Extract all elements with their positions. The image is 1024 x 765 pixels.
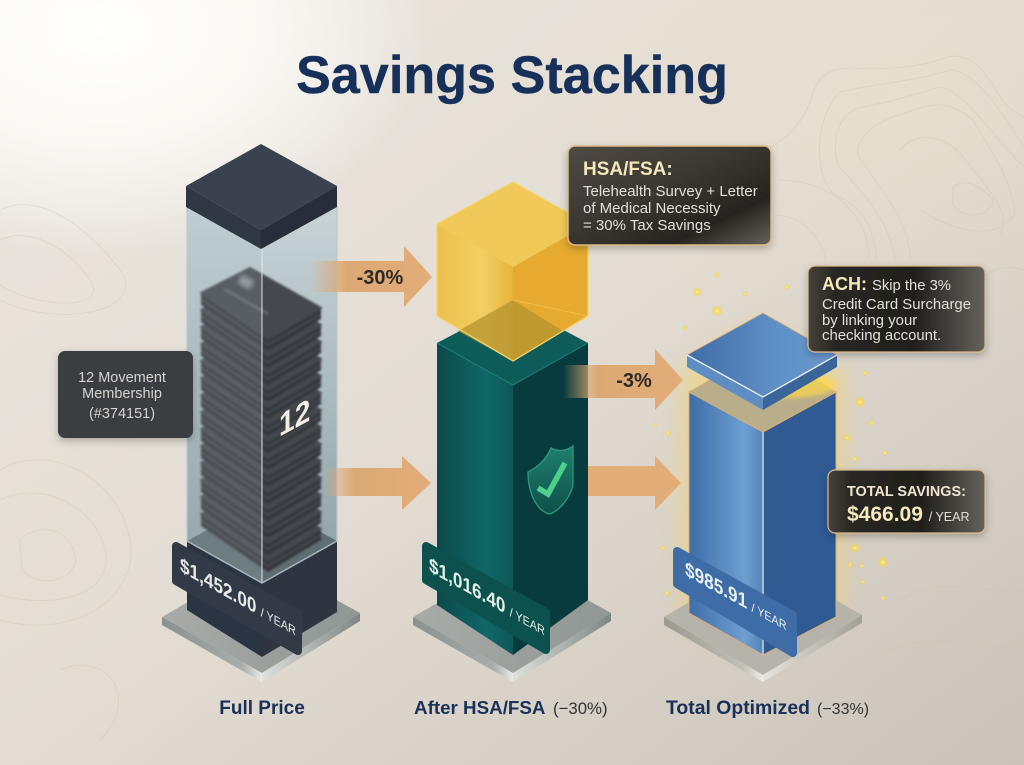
arrow: -3%: -3%: [616, 370, 652, 392]
arrow: -30%: -30%: [357, 267, 404, 289]
blue pillar: [689, 350, 836, 655]
stack of 12 cards: [201, 268, 321, 572]
glass case: [187, 205, 337, 583]
arrow: HSA to total: [588, 456, 681, 510]
callout: HSA/FSA: Telehealth Survey + Letter: [583, 183, 758, 200]
callout: membership: 12 Movement: [78, 370, 166, 386]
callout: membership: Membership: [82, 386, 162, 402]
price tag: $1,016.40 / YEAR: [429, 554, 545, 641]
callout: ACH: by linking your: [822, 313, 917, 329]
callout: HSA/FSA: HSA/FSA:: [583, 159, 673, 180]
tower base block: [187, 541, 337, 657]
lid: [687, 313, 837, 410]
callout: ACH: Credit Card Surcharge: [822, 297, 971, 313]
callout: ACH: [808, 266, 985, 352]
column: after HSA/FSA tower: [413, 182, 611, 682]
gold cube: [437, 182, 588, 361]
tower cap: [186, 144, 337, 249]
teal pillar: [437, 303, 588, 655]
glass reflection: [187, 205, 337, 583]
callout: HSA/FSA: = 30% Tax Savings: [583, 217, 711, 234]
label: full price: Full Price: [219, 698, 305, 719]
label: total optimized: Total Optimized: [666, 697, 810, 719]
label: after HSA/FSA: After HSA/FSA: [414, 697, 545, 718]
icon: shield check: [528, 446, 573, 514]
card count: 12: [279, 391, 310, 444]
callout: total savings: TOTAL SAVINGS:: [847, 484, 966, 500]
column: full price tower: [162, 144, 360, 682]
price tag: $985.91 / YEAR: [685, 558, 787, 636]
glow under lid: [744, 372, 836, 398]
callout: membership: [58, 351, 193, 438]
platform: HSA: [413, 559, 611, 682]
glow: [680, 320, 845, 656]
column: total optimized tower: [652, 272, 889, 682]
label: after HSA/FSA: (−30%): [553, 699, 608, 718]
label: total optimized: (−33%): [817, 701, 869, 718]
platform: total: [664, 559, 862, 682]
arrow: full price to HSA: [322, 456, 431, 510]
title: Savings Stacking: [296, 46, 728, 105]
arrow: -3%: [563, 349, 683, 410]
callout: HSA/FSA: [568, 146, 771, 245]
arrow: -30%: [310, 246, 432, 307]
callout: total savings: $466.09 / YEAR: [847, 503, 970, 526]
callout: ACH: ACH: Skip the 3%: [822, 274, 951, 294]
price tag: [677, 551, 793, 653]
callout: total savings: [828, 470, 985, 533]
sparkles: [652, 272, 889, 600]
callout: HSA/FSA: of Medical Necessity: [583, 200, 721, 217]
callout: ACH: checking account.: [822, 328, 941, 344]
callout: membership: (#374151): [89, 406, 155, 422]
platform: full price: [162, 559, 360, 682]
price tag: $1,452.00 / YEAR: [180, 554, 296, 641]
